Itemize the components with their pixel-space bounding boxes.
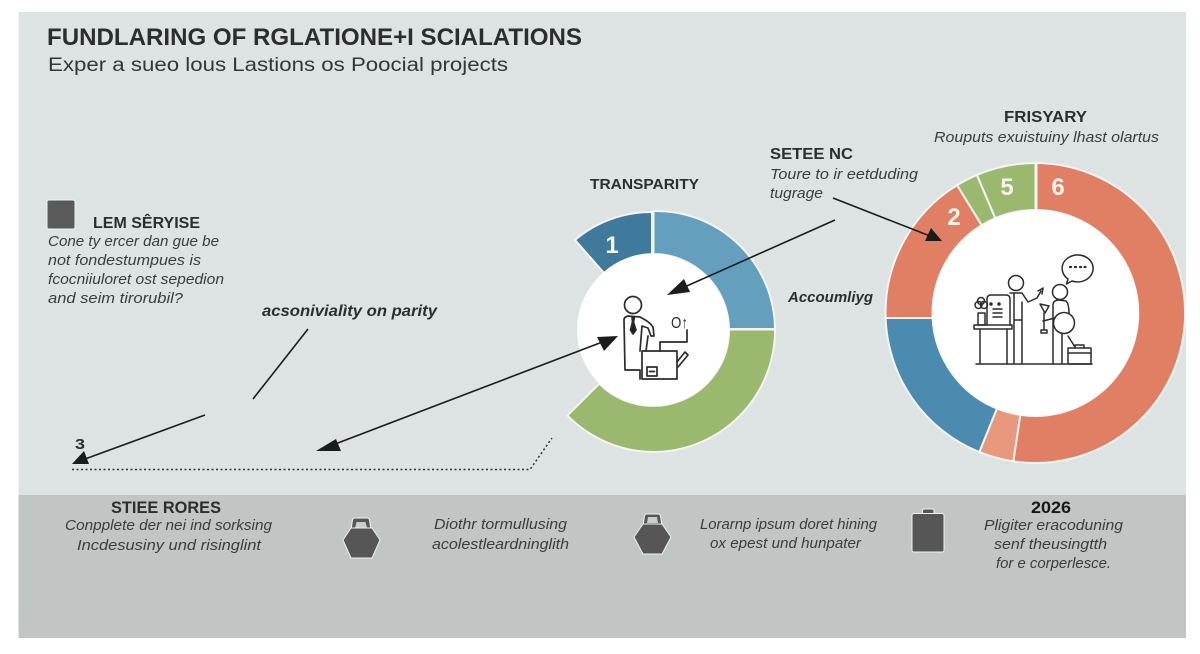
number 3: 3 [75, 436, 85, 453]
text: Conpplete der nei ind sorksing [65, 517, 273, 534]
icon: hexagon weight 2 [634, 514, 671, 554]
panel: left legend [47, 200, 224, 307]
legend text: fcocniiuloret ost sepedion [48, 271, 224, 288]
segment: green [567, 330, 775, 452]
number 2: 2 [947, 204, 961, 231]
callout text line 2: tugrage [770, 185, 823, 202]
arrow: to left donut centre [667, 220, 835, 295]
number 6: 6 [1051, 174, 1065, 201]
legend heading: LEM SÊRYISE [93, 213, 200, 232]
sub text: Rouputs exuistuiny lhast olartus [934, 129, 1160, 146]
line 2: ox epest und hunpater [710, 535, 862, 552]
line: accountability leader [253, 329, 308, 399]
icon: person with box [624, 296, 688, 379]
text block: diothr [432, 516, 569, 553]
segment: pale orange [979, 408, 1020, 461]
legend text: not fondestumpues is [48, 252, 202, 269]
segment: dark blue [575, 212, 652, 273]
number 5: 5 [1000, 174, 1014, 201]
donut centre [577, 254, 729, 406]
number 1: 1 [605, 232, 619, 259]
heading: frisyary [934, 109, 1160, 146]
background panel [18, 12, 1186, 495]
segment: blue [886, 318, 997, 452]
icon: battery [912, 509, 944, 552]
subtitle: Exper a sueo lous Lastions os Poocial projects [48, 55, 508, 76]
dotted connector [72, 438, 552, 470]
legend text: Cone ty ercer dan gue be [48, 233, 219, 250]
line 3: for e corperlesce. [996, 555, 1111, 572]
right donut chart [886, 163, 1185, 463]
segment: light blue [654, 211, 775, 329]
label: accountability: acsonivialìty on parity [262, 303, 438, 320]
text line 2: Incdesusiny und risinglint [77, 537, 262, 554]
line 2: acolestleardninglith [432, 536, 569, 553]
left donut chart [567, 211, 775, 452]
line 1: Diothr tormullusing [434, 516, 568, 533]
heading: STIEE RORES [111, 498, 221, 517]
segment: green 5 [977, 163, 1036, 218]
line 1: Pligiter eracoduning [984, 517, 1124, 534]
icon: hexagon weight 1 [343, 518, 380, 558]
panel: 2026 [984, 498, 1124, 572]
bottom band [18, 495, 1186, 638]
year: 2026 [1031, 498, 1071, 517]
icon: grey square [47, 200, 75, 229]
legend text [48, 233, 224, 307]
line 1: Lorarnp ipsum doret hining [700, 516, 878, 533]
donut centre [932, 210, 1138, 416]
label: accounting: Accoumliyg [787, 289, 873, 306]
text block: lorarnp [700, 516, 878, 552]
title: FUNDLARING OF RGLATIONE+I SCIALATIONS [47, 24, 582, 51]
legend text: and seim tirorubil? [48, 290, 184, 307]
callout text: Toure to ir eetduding [770, 166, 919, 183]
callout heading: SETEE NC [770, 146, 853, 163]
arrow: to segment 2 [833, 198, 942, 241]
arrow: double headed long [316, 336, 618, 451]
label: transparity: TRANSPARITY [590, 176, 699, 193]
arrow: to number 3 [72, 415, 205, 464]
icon: people at desk [974, 255, 1093, 364]
line 2: senf theusingtth [994, 536, 1107, 553]
segment: orange 6 [1013, 163, 1185, 463]
panel: stiee rores [65, 498, 273, 554]
icon label: O↑ [671, 315, 688, 332]
segment: small green [957, 175, 995, 225]
heading text: FRISYARY [1004, 109, 1087, 126]
callout: setee nc [770, 146, 919, 202]
segment: orange 2 [886, 185, 982, 318]
